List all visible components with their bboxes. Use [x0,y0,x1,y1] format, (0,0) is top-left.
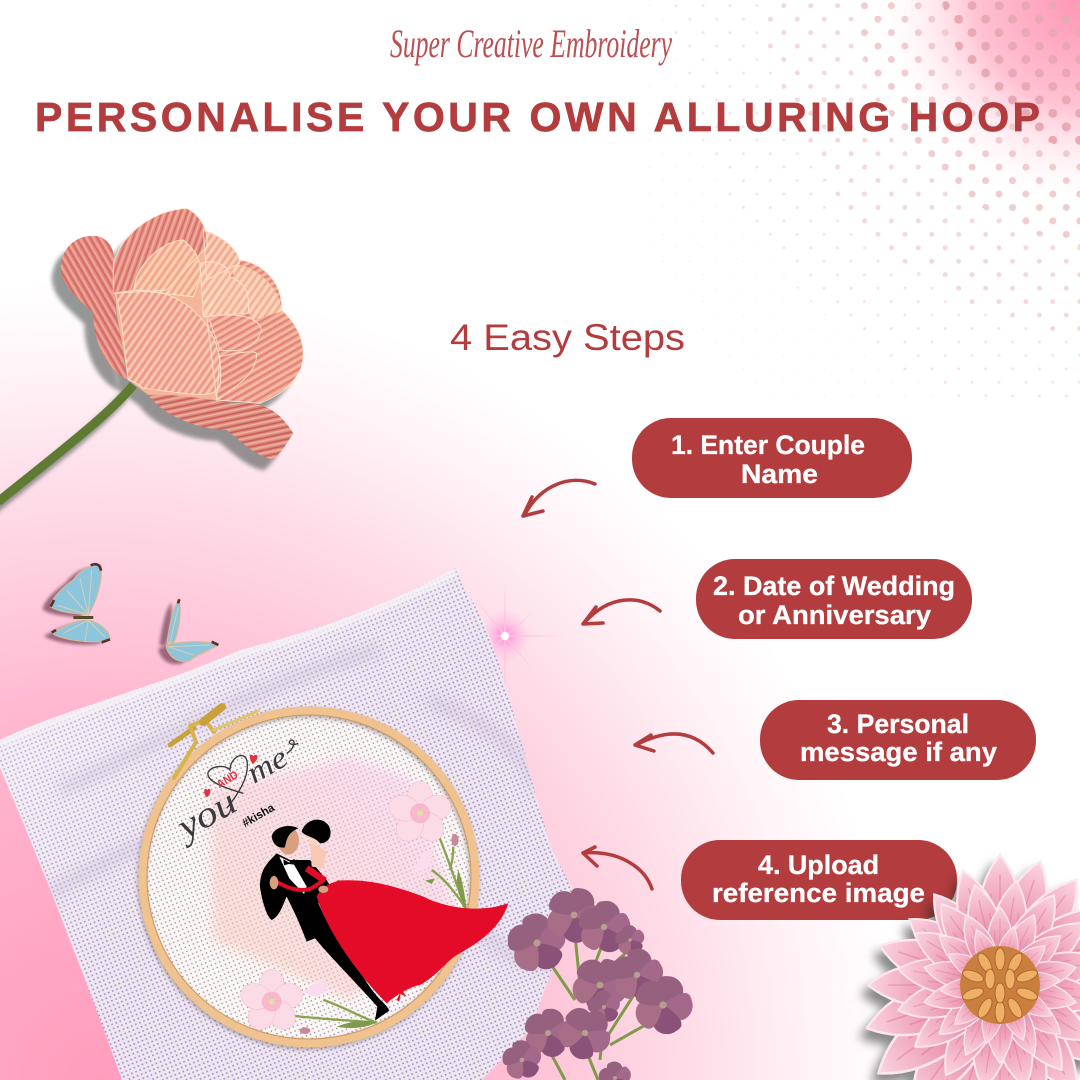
panel: step 3 pill [760,700,1036,780]
icon: peony flower [0,208,303,513]
red gown [317,880,508,1003]
lettering: you and me [165,740,298,849]
panel: step 1 pill: Name [741,459,818,489]
arrow: step 2 [583,600,660,624]
panel: step 2 pill [696,559,972,639]
panel: step 1 pill: 1. Enter Couple [671,430,865,460]
panel: step 3 pill: message if any [800,737,997,767]
peony cast shadow [0,219,294,513]
arrow: step 3 [635,734,713,753]
title: PERSONALISE YOUR OWN ALLURING HOOP [35,94,1040,140]
icon: pressed purple flowers [500,875,705,1080]
brass clasp [170,707,258,778]
panel: step 4 pill: reference image [712,878,925,908]
stem [0,385,133,502]
arrow: step 4 [583,847,652,889]
panel: step 1 pill [632,418,912,498]
faint pink background square [210,757,457,1000]
subheading: 4 easy steps: 4 Easy Steps [450,317,685,358]
panel: step 2 pill: or Anniversary [738,600,931,630]
icon: pink dahlia [860,855,1080,1080]
blossom sprig: right [386,781,467,910]
panel: embroidery fabric [0,568,578,1080]
panel: step 4 pill [681,840,957,920]
sparkle [462,580,565,705]
lettering: you and me: AND [215,769,240,791]
arrow: step 1 [523,480,595,516]
lettering: you and me: me [240,740,294,790]
wooden hoop ring [143,711,475,1043]
hoop artwork (zoom coordinates) [165,740,508,1035]
lettering: you and me: you [165,781,243,849]
hoop mesh interior [147,715,471,1039]
brand script heading: Super Creative Embroidery [390,21,672,66]
man in tuxedo [260,853,389,1021]
panel: step 2 pill: 2. Date of Wedding [713,571,955,601]
butterfly cast shadow [43,568,210,664]
embroidery hoop [143,707,475,1043]
icon: butterflies [43,564,218,664]
hashtag name: #kisha [240,801,277,830]
panel: step 4 pill: 4. Upload [758,850,879,880]
woman [310,840,327,868]
blossom sprig: bottom [237,970,377,1035]
panel: step 3 pill: 3. Personal [827,709,969,739]
couple illustration [260,820,508,1021]
